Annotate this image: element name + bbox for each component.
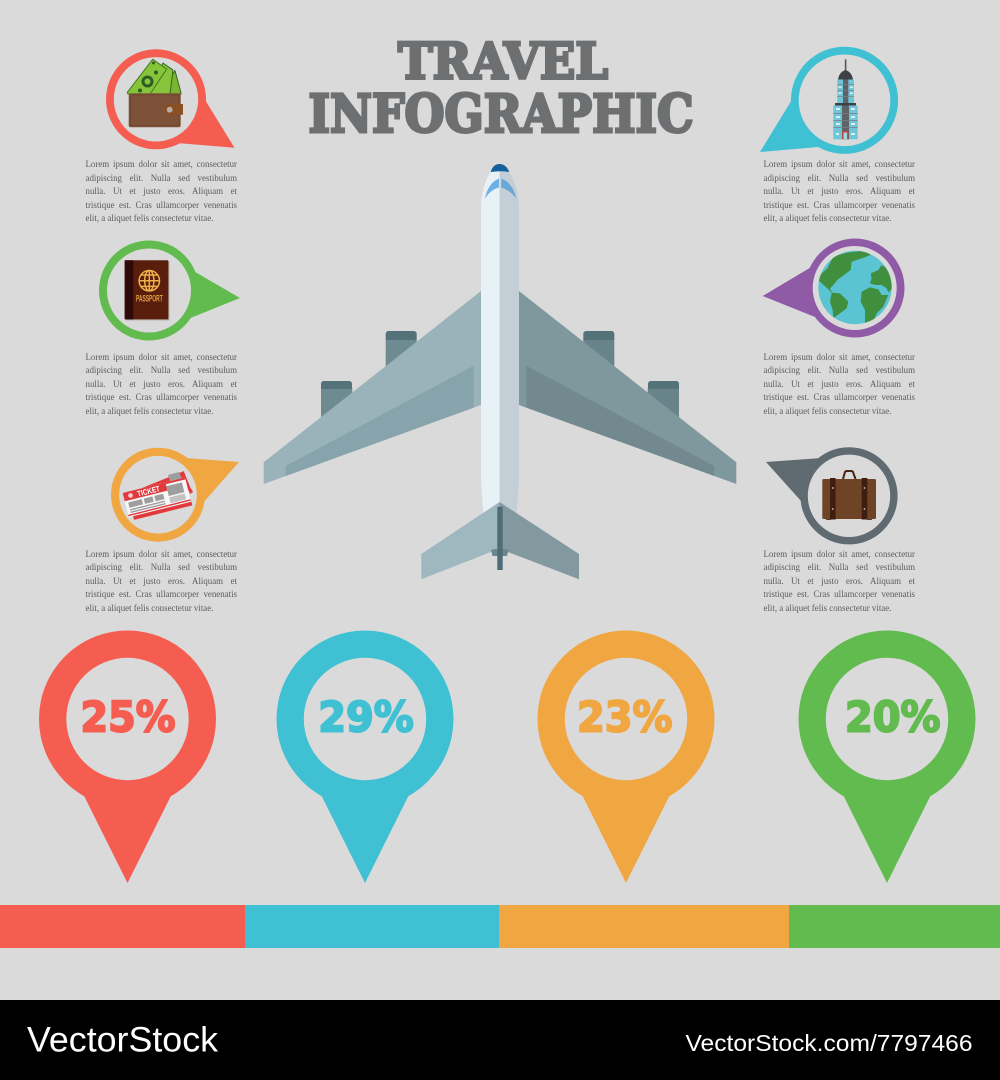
- text block: wallet: tristique est. Cras ullamcorper venenatis: [86, 200, 237, 210]
- text block: ticket: tristique est. Cras ullamcorper venenatis: [86, 589, 237, 599]
- fuselage: [481, 164, 519, 515]
- text block: globe: nulla. Ut et justo eros. Aliquam et: [764, 379, 915, 389]
- pin: 29%: [276, 630, 454, 883]
- text block: wallet: adipiscing elit. Nulla sed vestibulum: [86, 173, 237, 183]
- text block: globe: [764, 352, 915, 416]
- watermark footer: [0, 1000, 1000, 1080]
- proportion bar: [0, 905, 1000, 948]
- airplane: [264, 164, 736, 579]
- text block: passport: [86, 352, 237, 416]
- text block: skyscraper: [764, 159, 915, 223]
- pin: 25%: [39, 630, 216, 883]
- text block: skyscraper: nulla. Ut et justo eros. Aliquam et: [764, 186, 915, 196]
- text block: globe: tristique est. Cras ullamcorper venenatis: [764, 392, 915, 402]
- pin: 20%: 20%: [845, 692, 940, 742]
- text block: passport: nulla. Ut et justo eros. Aliquam et: [86, 379, 237, 389]
- text block: wallet: Lorem ipsum dolor sit amet, consectetur: [86, 159, 237, 169]
- text block: suitcase: Lorem ipsum dolor sit amet, consectetur: [764, 548, 915, 558]
- text block: suitcase: adipiscing elit. Nulla sed vestibulum: [764, 562, 915, 572]
- title: [308, 32, 694, 145]
- text block: globe: adipiscing elit. Nulla sed vestibulum: [764, 365, 915, 375]
- title: TRAVEL: [398, 32, 608, 90]
- engines: [321, 331, 679, 420]
- icon: suitcase: [822, 471, 876, 520]
- text block: skyscraper: elit, a aliquet felis consectetur vitae.: [764, 213, 891, 223]
- text block: suitcase: tristique est. Cras ullamcorper venenatis: [764, 589, 915, 599]
- cockpit nose: [491, 164, 509, 172]
- text block: skyscraper: Lorem ipsum dolor sit amet, consectetur: [764, 159, 915, 169]
- text block: wallet: nulla. Ut et justo eros. Aliquam et: [86, 186, 237, 196]
- watermark footer: VectorStock.com/7797466: [686, 1030, 972, 1056]
- callout: suitcase: [766, 447, 898, 544]
- text block: ticket: Lorem ipsum dolor sit amet, consectetur: [86, 548, 237, 558]
- watermark footer: VectorStock: [27, 1020, 218, 1060]
- icon: globe: [818, 251, 893, 324]
- icon: passport: [125, 260, 169, 320]
- text block: suitcase: nulla. Ut et justo eros. Aliquam et: [764, 576, 915, 586]
- title: INFOGRAPHIC: [308, 84, 694, 145]
- text block: skyscraper: tristique est. Cras ullamcorper venenatis: [764, 200, 915, 210]
- icon: tickets: TICKET: [136, 484, 161, 499]
- text block: skyscraper: adipiscing elit. Nulla sed vestibulum: [764, 173, 915, 183]
- text block: ticket: elit, a aliquet felis consectetur vitae.: [86, 603, 213, 613]
- text block: passport: adipiscing elit. Nulla sed vestibulum: [86, 365, 237, 375]
- pin: 20%: [798, 630, 976, 883]
- wings: [264, 291, 736, 484]
- text block: passport: tristique est. Cras ullamcorper venenatis: [86, 392, 237, 402]
- text block: globe: Lorem ipsum dolor sit amet, consectetur: [764, 352, 915, 362]
- text block: ticket: adipiscing elit. Nulla sed vestibulum: [86, 562, 237, 572]
- icon: wallet and money: [127, 59, 183, 127]
- icon: skyscraper: [833, 59, 858, 139]
- icon: passport: PASSPORT: [136, 293, 163, 304]
- text block: ticket: [86, 548, 237, 613]
- text block: suitcase: elit, a aliquet felis consectetur vitae.: [764, 603, 891, 613]
- callout: passport: [99, 240, 240, 340]
- cockpit windows: [485, 178, 499, 199]
- pin: 23%: 23%: [577, 692, 672, 742]
- pin: 25%: 25%: [80, 692, 176, 742]
- text block: passport: elit, a aliquet felis consectetur vitae.: [86, 406, 213, 416]
- callout: wallet: [106, 49, 234, 149]
- tail: [421, 502, 579, 579]
- text block: passport: Lorem ipsum dolor sit amet, consectetur: [86, 352, 237, 362]
- pin: 29%: 29%: [318, 692, 414, 742]
- text block: wallet: elit, a aliquet felis consectetur vitae.: [86, 213, 213, 223]
- text block: globe: elit, a aliquet felis consectetur vitae.: [764, 406, 891, 416]
- pin: 23%: [538, 630, 714, 883]
- text block: suitcase: [764, 548, 915, 613]
- text block: ticket: nulla. Ut et justo eros. Aliquam et: [86, 576, 237, 586]
- callout: globe: [763, 238, 904, 338]
- text block: wallet: [86, 159, 237, 223]
- callout: skyscraper: [760, 47, 898, 154]
- callout: ticket: [111, 448, 239, 542]
